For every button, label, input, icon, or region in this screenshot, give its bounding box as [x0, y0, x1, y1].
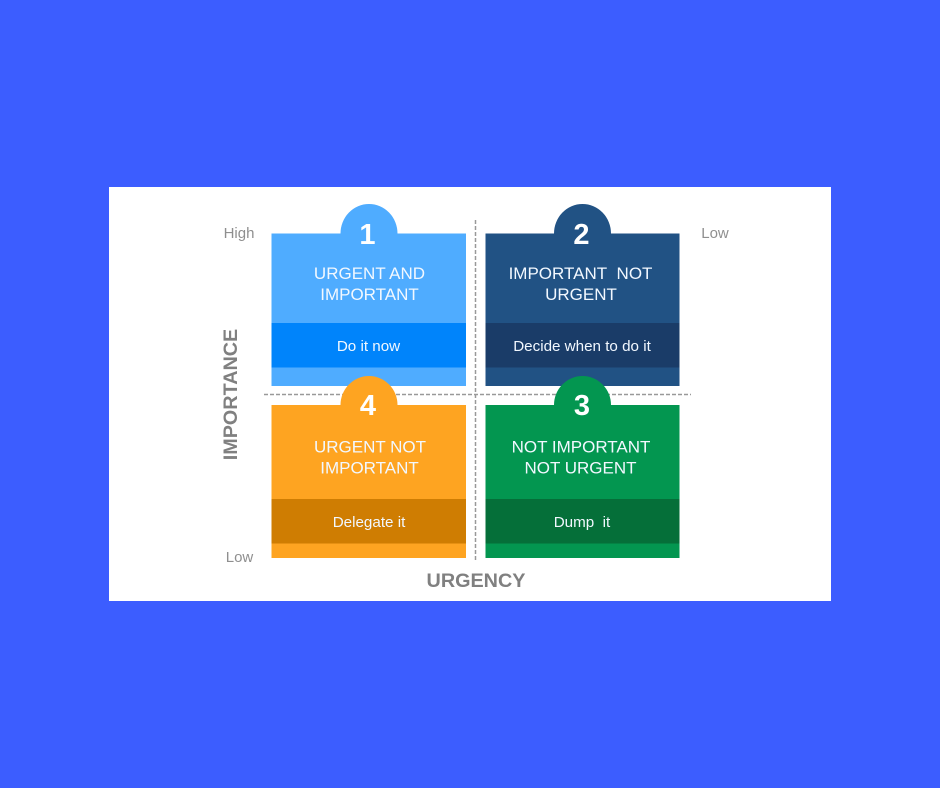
matrix content	[220, 204, 729, 592]
axis title: urgency: URGENCY	[427, 570, 525, 592]
quadrant 2: important not urgent: 2	[573, 219, 590, 251]
quadrant 3: not important not urgent	[486, 376, 680, 558]
quadrant 1: urgent and important: Do it now	[337, 338, 400, 355]
quadrant 2: important not urgent: IMPORTANT NOT	[509, 264, 652, 283]
quadrant 3: not important not urgent: Dump it	[554, 514, 611, 531]
quadrant 1: urgent and important	[272, 204, 466, 386]
white panel	[109, 187, 831, 601]
quadrant 3: not important not urgent: 3	[574, 390, 590, 422]
quadrant 4: urgent not important: IMPORTANT	[320, 458, 419, 478]
quadrant 1: urgent and important: 1	[359, 219, 376, 251]
vertical dashed axis	[474, 220, 476, 562]
label: low urgency: Low	[701, 225, 729, 242]
label: high importance: High	[224, 225, 254, 242]
quadrant 4: urgent not important: URGENT NOT	[314, 438, 426, 456]
quadrant 2: important not urgent: Decide when to do it	[513, 338, 652, 355]
label: low importance: Low	[226, 549, 253, 566]
horizontal dashed axis	[264, 394, 691, 396]
quadrant 4: urgent not important: 4	[360, 390, 376, 422]
quadrant 1: urgent and important: URGENT AND	[314, 264, 425, 283]
quadrant 2: important not urgent	[486, 204, 680, 386]
quadrant 3: not important not urgent: NOT URGENT	[524, 458, 637, 478]
quadrant 3: not important not urgent: NOT IMPORTANT	[512, 438, 650, 456]
quadrant 1: urgent and important: IMPORTANT	[320, 285, 419, 304]
quadrant 4: urgent not important	[272, 376, 466, 558]
axis title: importance: IMPORTANCE	[220, 329, 242, 460]
quadrant 4: urgent not important: Delegate it	[333, 514, 406, 531]
quadrant 2: important not urgent: URGENT	[545, 285, 617, 304]
